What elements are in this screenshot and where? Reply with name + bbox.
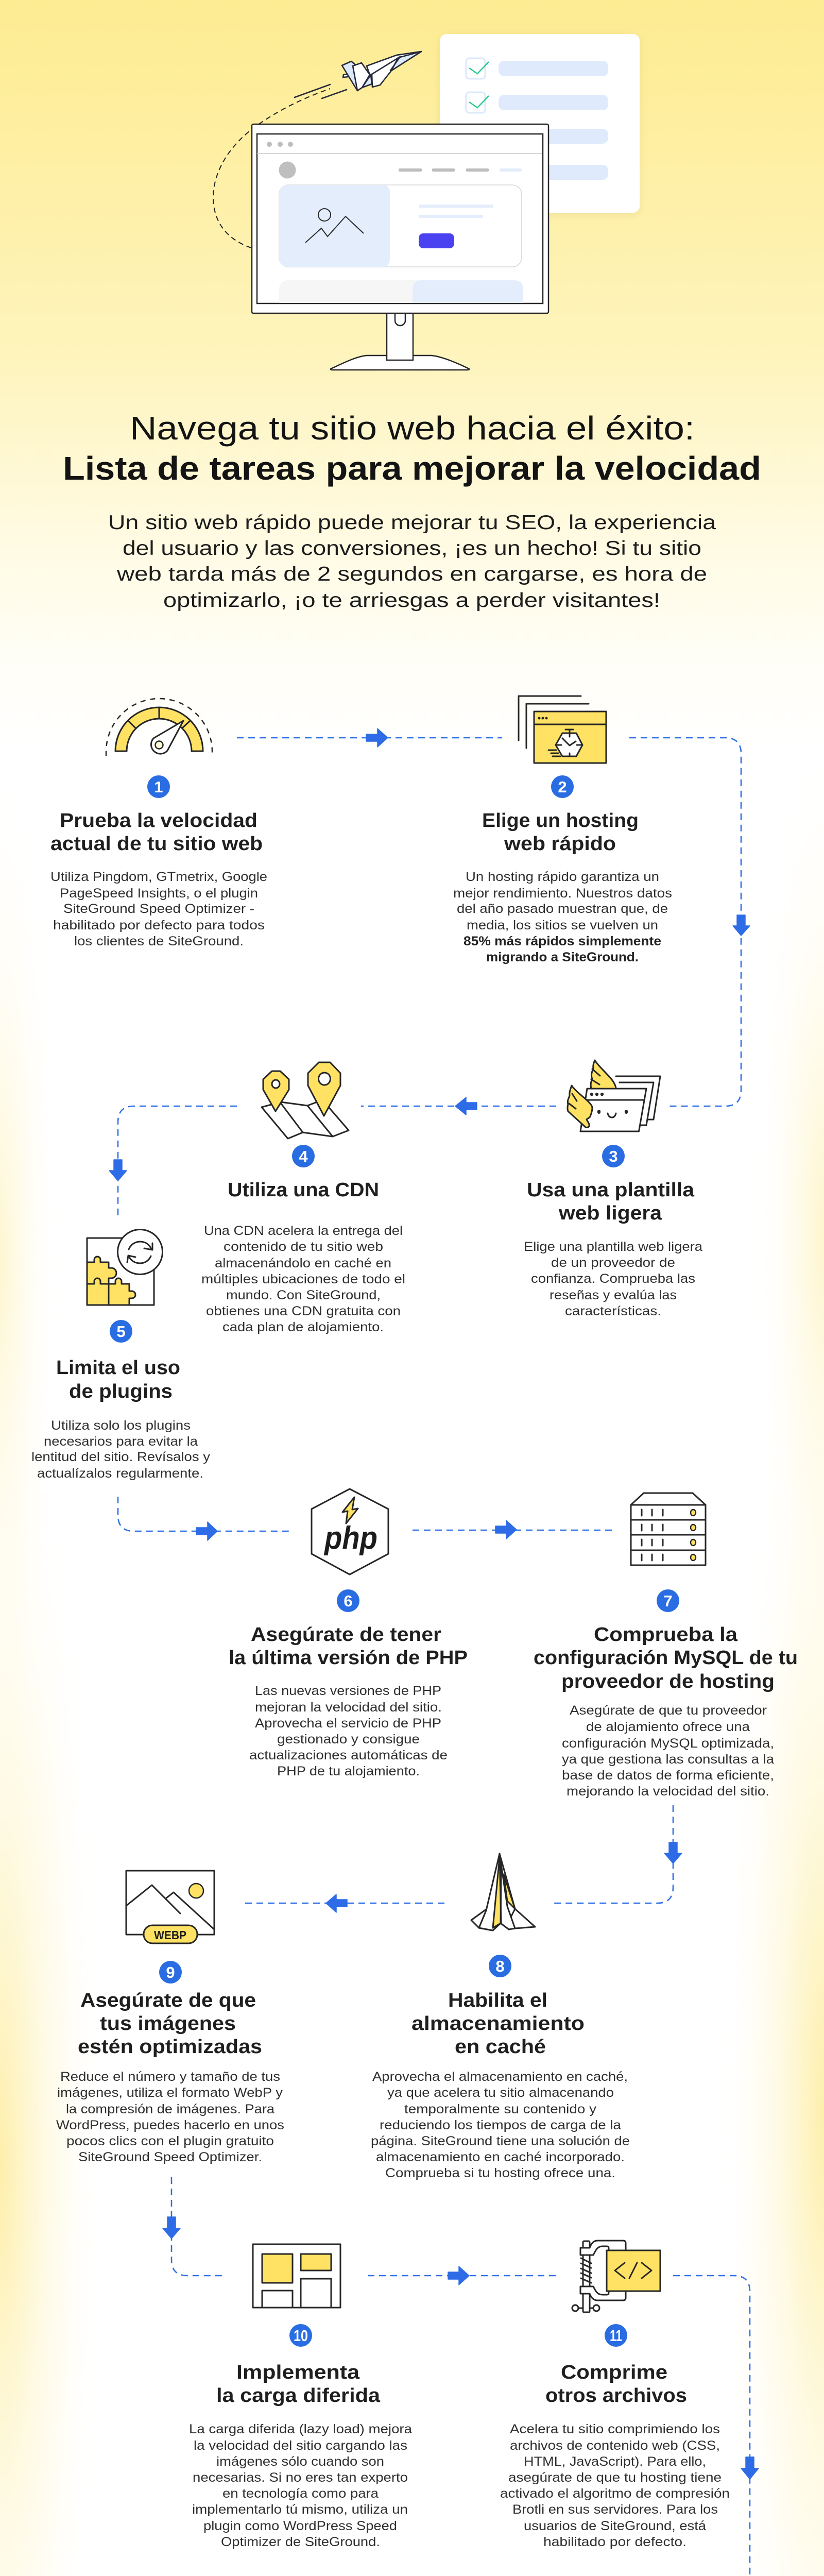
panel: step 8 <box>371 1854 630 2180</box>
number badge <box>292 1145 315 1167</box>
heading: la última versión de PHP <box>229 1647 468 1669</box>
heading <box>527 1179 695 1224</box>
text <box>189 2422 412 2549</box>
text: Optimizer de SiteGround. <box>221 2535 380 2549</box>
text <box>500 2422 730 2549</box>
heading <box>545 2362 687 2406</box>
checklist card <box>440 34 640 213</box>
icon: fast clock window <box>519 696 606 763</box>
text: reduciendo los tiempos de carga de la <box>380 2118 621 2132</box>
text: necesarios para evitar la <box>44 1434 198 1449</box>
number badge <box>289 2324 312 2347</box>
text: página. SiteGround tiene una solución de <box>371 2134 630 2148</box>
title: Lista de tareas para mejorar la velocidad <box>63 450 761 487</box>
heading: Elige un hosting <box>482 810 639 832</box>
number badge <box>489 1955 511 1977</box>
text: Utiliza Pingdom, GTmetrix, Google <box>50 870 267 884</box>
text: SiteGround Speed Optimizer - <box>63 902 254 916</box>
arrow 5 <box>196 1522 217 1540</box>
icon: webp image <box>126 1871 214 1943</box>
arrow 11 <box>741 2457 759 2479</box>
icon: plugin puzzle <box>87 1229 163 1305</box>
text <box>562 1703 774 1799</box>
text: necesarias. Si no eres tan experto <box>193 2470 408 2485</box>
panel: step 9 <box>56 1871 284 2164</box>
heading: en caché <box>455 2036 546 2058</box>
heading: otros archivos <box>545 2385 687 2406</box>
heading <box>50 810 263 855</box>
text: plugin como WordPress Speed <box>203 2519 397 2533</box>
dashed flight path <box>213 89 330 248</box>
heading: web rápido <box>504 833 616 855</box>
text: media, los sitios se vuelven un <box>467 918 658 933</box>
heading: Limita el uso <box>56 1357 180 1379</box>
number badge: 8 <box>495 1957 505 1975</box>
text: en tecnología como para <box>222 2486 379 2501</box>
icon: webp image: WEBP <box>154 1928 186 1942</box>
title <box>63 410 761 487</box>
heading <box>411 1990 585 2058</box>
hero illustration <box>213 34 640 370</box>
heading: Comprueba la <box>594 1624 738 1646</box>
text: lentitud del sitio. Revísalos y <box>31 1450 211 1464</box>
heading <box>482 810 639 855</box>
title: Navega tu sitio web hacia el éxito: <box>130 410 695 447</box>
arrow 9 <box>163 2217 180 2239</box>
text: almacenamiento en caché incorporado. <box>376 2150 625 2164</box>
panel: step 10 <box>189 2244 412 2549</box>
text: pocos clics con el plugin gratuito <box>66 2134 274 2148</box>
panel: step 2 <box>453 696 672 964</box>
connector 7 to 8 <box>552 1805 673 1903</box>
heading: la carga diferida <box>216 2385 381 2406</box>
text: activado el algoritmo de compresión <box>500 2486 730 2501</box>
text: Acelera tu sitio comprimiendo los <box>510 2422 720 2436</box>
panel: step 5 <box>31 1229 211 1481</box>
connector 10 to 11 <box>368 2275 559 2276</box>
number badge <box>110 1320 132 1343</box>
number badge: 10 <box>294 2327 308 2345</box>
text: PHP de tu alojamiento. <box>277 1764 420 1778</box>
text: Elige una plantilla web ligera <box>524 1240 702 1254</box>
heading: Habilita el <box>448 1990 547 2011</box>
number badge <box>159 1961 182 1984</box>
number badge: 11 <box>610 2327 622 2345</box>
text: Utiliza solo los plugins <box>51 1418 191 1433</box>
text: La carga diferida (lazy load) mejora <box>189 2422 412 2436</box>
flow connectors <box>109 728 759 2576</box>
panel: step 7 <box>534 1493 798 1799</box>
text: implementarlo tú mismo, utiliza un <box>192 2502 408 2517</box>
text: Reduce el número y tamaño de tus <box>60 2070 280 2084</box>
paper plane <box>295 52 421 98</box>
connector 4 to 5 <box>118 1106 237 1219</box>
heading <box>56 1357 180 1402</box>
text <box>371 2070 630 2180</box>
text: mejor rendimiento. Nuestros datos <box>453 886 672 901</box>
heading: tus imágenes <box>100 2013 236 2035</box>
text: Una CDN acelera la entrega del <box>204 1224 403 1238</box>
text: habilitado por defecto. <box>543 2535 686 2549</box>
text: Comprueba si tu hosting ofrece una. <box>385 2166 615 2180</box>
text <box>50 870 267 948</box>
arrow 8 <box>326 1894 347 1912</box>
number badge: 1 <box>154 778 163 796</box>
text: 85% más rápidos simplemente <box>464 934 661 948</box>
text: base de datos de forma eficiente, <box>562 1768 774 1783</box>
panel: step 3 <box>524 1060 702 1318</box>
text: PageSpeed Insights, o el plugin <box>60 886 258 901</box>
heading: Implementa <box>236 2362 360 2383</box>
arrow 3 <box>455 1097 477 1115</box>
heading: Comprime <box>561 2362 667 2383</box>
text: contenido de tu sitio web <box>224 1240 383 1254</box>
text <box>56 2070 284 2164</box>
text: imágenes, utiliza el formato WebP y <box>57 2086 283 2100</box>
number badge: 6 <box>344 1592 353 1610</box>
heading <box>534 1624 798 1692</box>
panel: step 11 <box>500 2241 730 2549</box>
intro paragraph: Un sitio web rápido puede mejorar tu SEO, la experiencia <box>108 512 716 534</box>
arrow 1 <box>366 728 388 747</box>
text: reseñas y evalúa las <box>550 1288 677 1302</box>
text: actualizaciones automáticas de <box>249 1748 448 1762</box>
text: Asegúrate de que tu proveedor <box>570 1703 767 1718</box>
heading: web ligera <box>558 1202 662 1224</box>
heading: Usa una plantilla <box>527 1179 695 1201</box>
text <box>31 1418 211 1481</box>
text: HTML, JavaScript). Para ello, <box>524 2454 706 2469</box>
connector 5 to 6 <box>118 1497 289 1531</box>
icon: php hexagon: php <box>323 1520 377 1556</box>
monitor <box>252 124 548 313</box>
number badge: 4 <box>299 1147 308 1165</box>
text: la compresión de imágenes. Para <box>66 2102 274 2116</box>
text: confianza. Comprueba las <box>531 1272 695 1286</box>
text: ya que acelera tu sitio almacenando <box>387 2086 614 2100</box>
intro paragraph: optimizarlo, ¡o te arriesgas a perder visitantes! <box>163 589 660 612</box>
intro paragraph <box>108 512 716 612</box>
connector 2 to 3 <box>629 738 741 1106</box>
text: mejorando la velocidad del sitio. <box>566 1784 769 1799</box>
heading: estén optimizadas <box>78 2036 262 2058</box>
text: la velocidad del sitio cargando las <box>194 2438 407 2453</box>
heading: Utiliza una CDN <box>228 1179 379 1201</box>
number badge <box>602 1145 625 1167</box>
number badge <box>605 2324 627 2347</box>
panel: step 6 <box>229 1489 468 1778</box>
text: de un proveedor de <box>551 1256 675 1270</box>
heading: proveedor de hosting <box>561 1671 775 1692</box>
text: múltiples ubicaciones de todo el <box>201 1272 405 1286</box>
heading: actual de tu sitio web <box>50 833 263 855</box>
text: usuarios de SiteGround, está <box>524 2519 706 2533</box>
number badge: 5 <box>116 1323 126 1341</box>
heading: almacenamiento <box>411 2013 585 2035</box>
arrow 4 <box>109 1160 127 1181</box>
text: Brotli en sus servidores. Para los <box>512 2502 718 2517</box>
text: gestionado y consigue <box>277 1732 420 1747</box>
text: de alojamiento ofrece una <box>586 1720 750 1734</box>
heading: de plugins <box>69 1381 173 1402</box>
number badge: 3 <box>609 1147 618 1165</box>
connector 3 to 4 <box>361 1106 556 1107</box>
text: cada plan de alojamiento. <box>222 1320 384 1334</box>
text <box>249 1684 448 1778</box>
text: Aprovecha el servicio de PHP <box>255 1716 441 1731</box>
icon: php hexagon <box>312 1489 388 1574</box>
text: Un hosting rápido garantiza un <box>466 870 659 884</box>
arrow 6 <box>495 1520 517 1539</box>
panel: step 4 <box>201 1062 405 1334</box>
text: WordPress, puedes hacerlo en unos <box>56 2118 284 2132</box>
heading <box>216 2362 381 2406</box>
icon: speed gauge <box>106 699 212 756</box>
text: asegúrate de que tu hosting tiene <box>508 2470 722 2485</box>
text: Las nuevas versiones de PHP <box>255 1684 441 1698</box>
text: temporalmente su contenido y <box>404 2102 597 2116</box>
heading: Prueba la velocidad <box>60 810 258 832</box>
panel: step 1 <box>50 699 267 948</box>
connector 9 to 10 <box>171 2177 222 2276</box>
text: características. <box>565 1304 661 1318</box>
stand <box>331 312 469 370</box>
text: ya que gestiona las consultas a la <box>562 1752 774 1767</box>
text: del año pasado muestran que, de <box>457 902 668 916</box>
heading <box>78 1990 262 2058</box>
text: habilitado por defecto para todos <box>53 918 265 933</box>
text: mundo. Con SiteGround, <box>226 1288 381 1302</box>
number badge <box>551 775 574 798</box>
icon: database server <box>631 1493 706 1565</box>
connector 6 to 7 <box>413 1530 612 1531</box>
text: los clientes de SiteGround. <box>74 934 244 948</box>
icon: paper rocket <box>471 1854 535 1930</box>
icon: map with pins <box>262 1062 349 1139</box>
icon: lazy load layout <box>253 2244 340 2308</box>
text: actualízalos regularmente. <box>37 1466 203 1481</box>
text: Aprovecha el almacenamiento en caché, <box>372 2070 628 2084</box>
intro paragraph: web tarda más de 2 segundos en cargarse, es hora de <box>116 563 707 585</box>
arrow 2 <box>733 915 750 936</box>
icon: code in clamp <box>572 2241 660 2312</box>
number badge: 2 <box>558 778 567 796</box>
connector 1 to 2 <box>237 737 502 738</box>
connector 8 to 9 <box>242 1903 444 1904</box>
connector 11 to 12 <box>604 2276 750 2576</box>
arrow 10 <box>448 2266 469 2285</box>
number badge <box>147 775 170 798</box>
heading: configuración MySQL de tu <box>534 1647 798 1669</box>
text: SiteGround Speed Optimizer. <box>78 2150 262 2164</box>
text <box>201 1224 405 1334</box>
number badge <box>657 1589 679 1612</box>
number badge: 9 <box>166 1963 175 1981</box>
number badge: 7 <box>663 1592 673 1610</box>
number badge <box>337 1589 359 1612</box>
text: imágenes sólo cuando son <box>216 2454 384 2469</box>
arrow 7 <box>664 1842 682 1863</box>
text: configuración MySQL optimizada, <box>562 1736 774 1751</box>
icon: winged web template <box>568 1060 660 1131</box>
text: almacenándolo en caché en <box>215 1256 391 1270</box>
text <box>453 870 672 964</box>
intro paragraph: del usuario y las conversiones, ¡es un hecho! Si tu sitio <box>123 537 701 560</box>
heading <box>229 1624 468 1669</box>
text: obtienes una CDN gratuita con <box>206 1304 401 1318</box>
text: mejoran la velocidad del sitio. <box>255 1700 442 1715</box>
text: migrando a SiteGround. <box>486 950 639 964</box>
text <box>524 1240 702 1318</box>
heading: Asegúrate de tener <box>251 1624 441 1646</box>
heading: Asegúrate de que <box>80 1990 256 2011</box>
text: archivos de contenido web (CSS, <box>510 2438 720 2453</box>
